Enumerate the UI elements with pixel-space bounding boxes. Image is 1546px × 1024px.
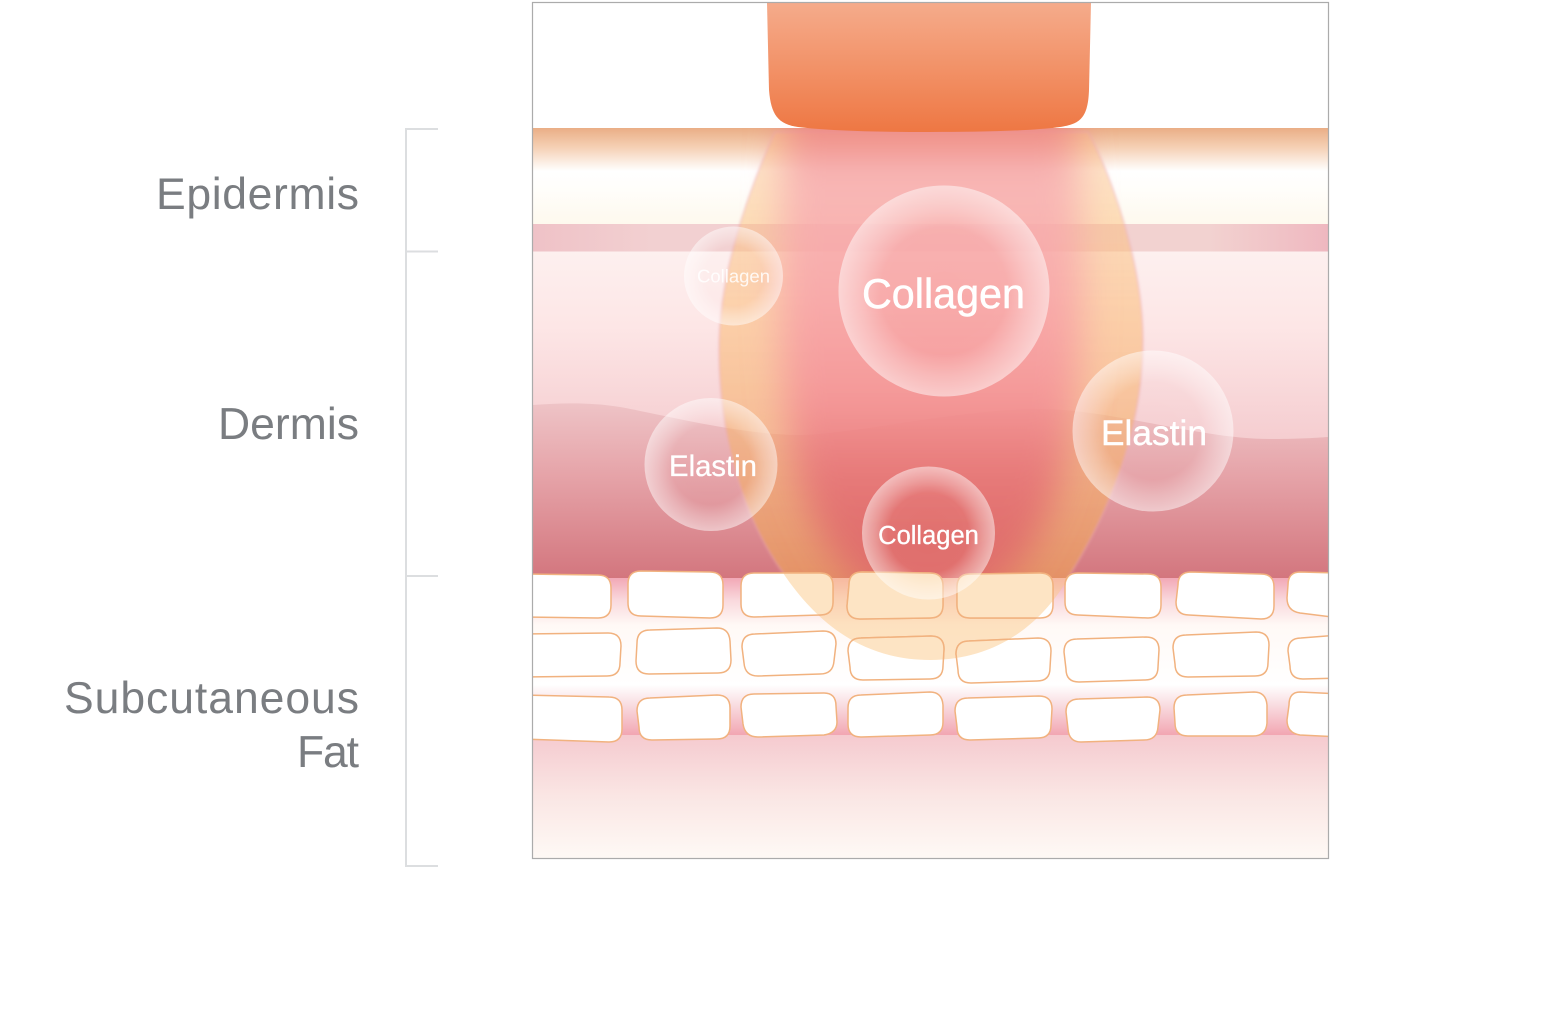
heat zone: outer orange halo in dermis — [718, 137, 1144, 578]
label: Subcutaneous Fat: Fat — [297, 728, 360, 777]
panel border — [532, 2, 1328, 858]
heat zone: pink core — [780, 100, 1081, 615]
panel background — [533, 3, 1328, 858]
epidermis layer — [533, 128, 1328, 224]
applicator — [767, 3, 1091, 132]
heat zone: lower halo in fat — [819, 578, 1066, 660]
epidermis basal band — [533, 224, 1328, 252]
bubble: lower Collagen — [862, 466, 995, 600]
bubble: large Collagen: Collagen — [862, 271, 1025, 317]
bubble: left Elastin: Elastin — [669, 450, 757, 483]
bubble: right Elastin — [1072, 350, 1234, 512]
label: Epidermis: Epidermis — [156, 170, 359, 219]
label: Dermis: Dermis — [218, 400, 359, 449]
fat cells tinted by heat zone — [783, 571, 1070, 660]
panel: skin cross-section — [522, 3, 1340, 858]
bubble: left Elastin — [644, 398, 778, 531]
label: Subcutaneous Fat: Subcutaneous — [64, 674, 359, 723]
bubble: lower Collagen: Collagen — [878, 522, 979, 550]
lower fat gradient — [533, 735, 1328, 858]
bubble: small Collagen: Collagen — [697, 266, 770, 286]
label: Subcutaneous Fat — [64, 674, 360, 777]
subcutaneous fat background — [533, 578, 1328, 735]
bubble: large Collagen — [838, 186, 1050, 396]
layer brackets — [406, 129, 438, 866]
bubble: right Elastin: Elastin — [1101, 414, 1207, 453]
lower dermis wave layer — [533, 403, 1328, 580]
bubble: small Collagen — [684, 226, 783, 326]
upper dermis layer — [533, 252, 1328, 442]
fat cells — [522, 571, 1340, 742]
